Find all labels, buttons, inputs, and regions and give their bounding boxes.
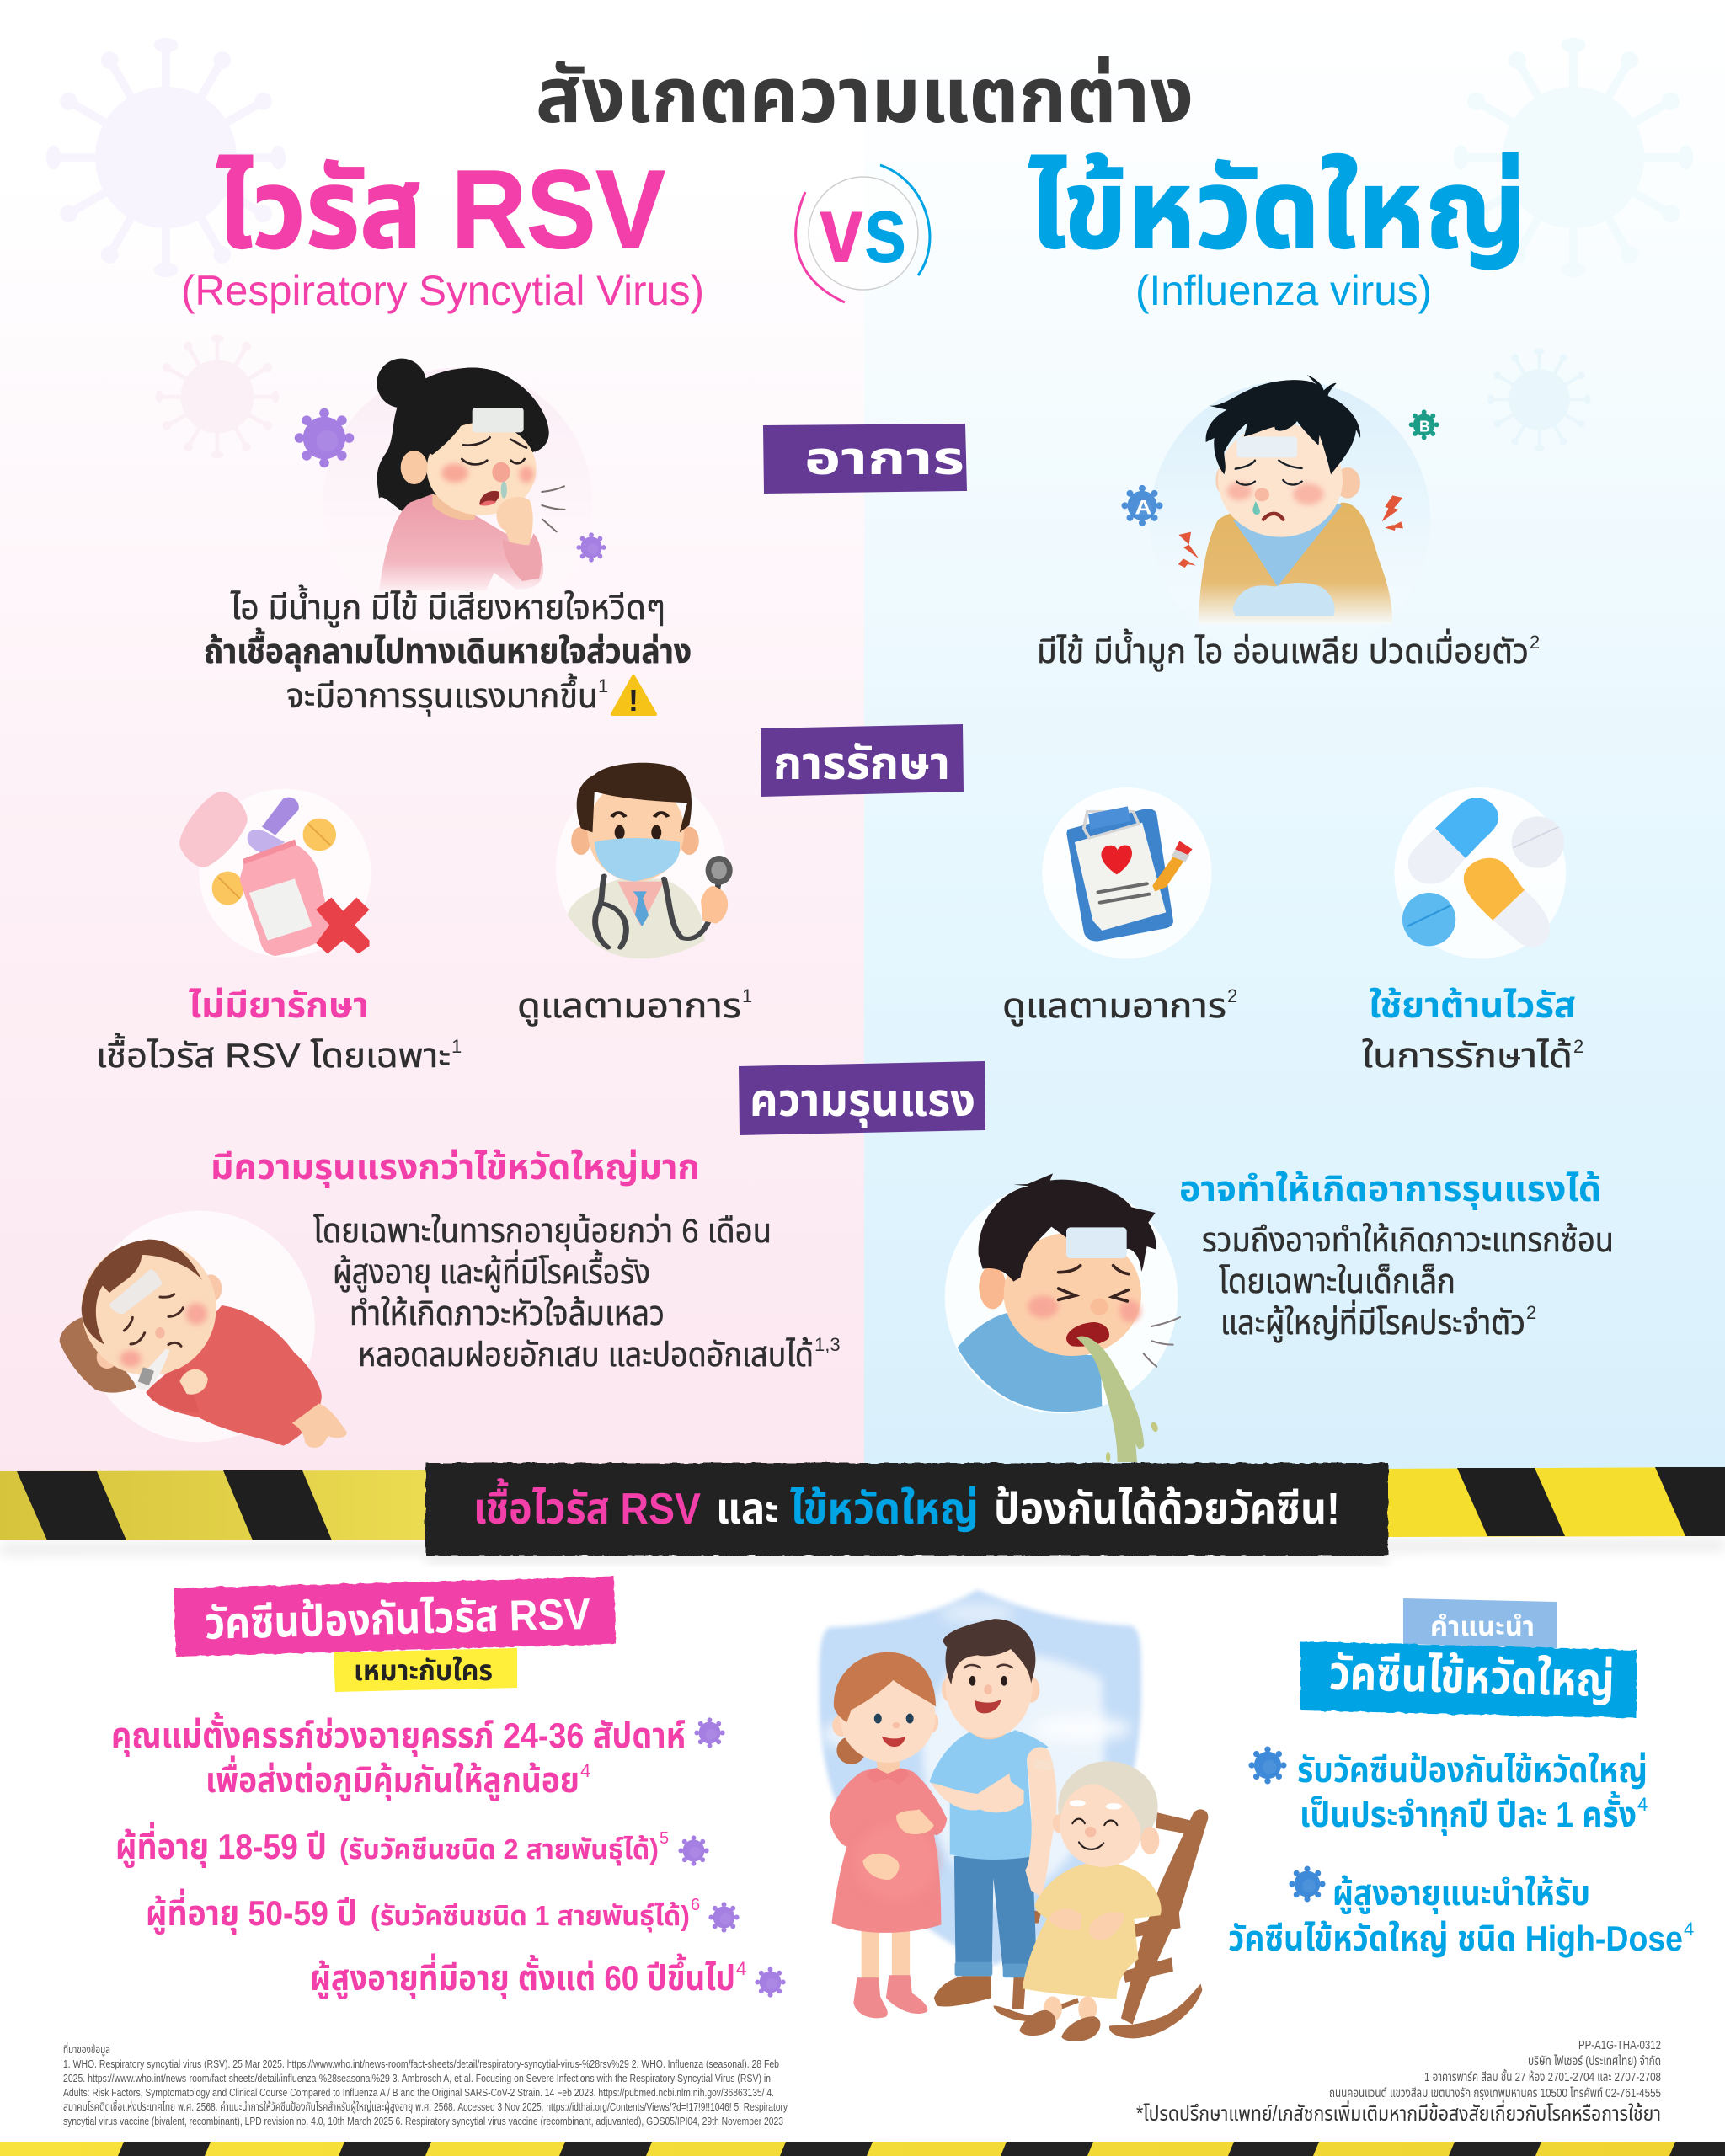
text block: RSV symptomatic care: 1 — [742, 985, 752, 1006]
text block: flu vaccine advice: 4 — [1637, 1794, 1648, 1815]
text block: influenza symptoms: มีไข้ มีน้ำมูก ไอ อ่อนเพลีย ปวดเมื่อยตัว — [1037, 628, 1529, 671]
title: สังเกตความแตกต่าง — [536, 53, 1194, 139]
text block: RSV symptoms: ถ้าเชื้อลุกลามไปทางเดินหายใจส่วนล่าง — [204, 627, 692, 672]
text block: influenza symptoms: 2 — [1530, 632, 1540, 653]
heading: RSV severity: มีความรุนแรงกว่าไข้หวัดใหญ่มาก — [211, 1147, 700, 1188]
text block: RSV vaccine eligibility: (รับวัคซีนชนิด 1 สายพันธุ์ได้) — [371, 1900, 690, 1933]
text block: flu vaccine advice: รับวัคซีนป้องกันไข้หวัดใหญ่ — [1297, 1750, 1648, 1790]
text block: flu vaccine advice: ผู้สูงอายุแนะนำให้รับ — [1332, 1873, 1590, 1914]
text block: RSV symptoms: จะมีอาการรุนแรงมากขึ้น — [286, 673, 598, 716]
label: RSV vaccine — [174, 1577, 616, 1657]
illustration: sick baby with thermometer — [60, 1211, 347, 1448]
heading: influenza — [1028, 147, 1527, 314]
section label: treatment: การรักษา — [773, 739, 950, 789]
references: syncytial virus vaccine (bivalent, recombinant), LPD revision no. 4.0, 10th March 2025 6. Respiratory syncytial virus vaccine (recombinant, adjuvanted), GDS05/IPI04, 29th November 2023 — [63, 2115, 783, 2127]
text block: RSV vaccine eligibility — [111, 1711, 746, 1999]
text block: antiviral treatment: 2 — [1573, 1036, 1583, 1057]
panel background: RSV pink side — [0, 0, 864, 1482]
icon: virus type A: A — [1135, 496, 1151, 519]
text block: RSV symptomatic care: ดูแลตามอาการ — [517, 988, 741, 1026]
shield — [820, 1590, 1141, 1965]
text block: RSV vaccine eligibility: 4 — [736, 1958, 746, 1979]
label: recommendation — [1403, 1598, 1557, 1648]
icon: purple virus large — [295, 408, 354, 467]
text block: RSV vaccine eligibility: คุณแม่ตั้งครรภ์ช่วงอายุครรภ์ 24-36 สัปดาห์ — [111, 1711, 686, 1757]
illustration: medicine bottle with cross — [179, 789, 371, 958]
illustration: family with shield — [820, 1590, 1208, 2041]
panel background: influenza blue side — [864, 0, 1725, 1482]
text block: RSV vaccine eligibility: 6 — [691, 1896, 700, 1914]
icon: virus type A — [1121, 485, 1162, 526]
icon: warning triangle — [612, 676, 655, 718]
illustration: doctor with mask — [556, 763, 733, 958]
text block: RSV severity detail: ทำให้เกิดภาวะหัวใจล้มเหลว — [350, 1295, 665, 1332]
text block: flu severity detail: โดยเฉพาะในเด็กเล็ก — [1219, 1263, 1455, 1300]
illustration: woman coughing — [323, 359, 592, 638]
banner: vaccine message: และ — [716, 1485, 779, 1534]
text block: flu severity detail: รวมถึงอาจทำให้เกิดภาวะแทรกซ้อน — [1202, 1222, 1614, 1259]
background virus: small right — [1487, 348, 1591, 451]
background virus: large left — [46, 38, 286, 277]
banner: vaccine message: ป้องกันได้ด้วยวัคซีน! — [994, 1485, 1340, 1534]
text block: RSV symptoms: 1 — [598, 675, 608, 696]
text block: RSV severity detail: โดยเฉพาะในทารกอายุน้อยกว่า 6 เดือน — [313, 1213, 772, 1251]
illustration: clipboard with heart — [1042, 787, 1212, 958]
text block: RSV symptoms: ไอ มีน้ำมูก มีไข้ มีเสียงหายใจหวีดๆ — [230, 584, 665, 627]
company details: PP-A1G-THA-0312 — [1578, 2038, 1661, 2052]
banner: vaccine message — [425, 1463, 1388, 1563]
background virus: small left — [155, 335, 280, 458]
icon: purple virus bullet 1 — [694, 1717, 725, 1748]
label: recommendation: คำแนะนำ — [1430, 1611, 1535, 1641]
hazard tape band — [0, 1467, 1725, 1556]
text block: flu vaccine advice — [1228, 1750, 1694, 1958]
icon: warning triangle: ! — [628, 683, 638, 718]
text block: RSV severity detail: 1,3 — [814, 1334, 841, 1355]
icon: blue virus bullet 1 — [1248, 1746, 1287, 1785]
icon: virus type B: B — [1419, 418, 1430, 435]
references — [63, 2041, 788, 2127]
label: suitable for whom — [334, 1648, 517, 1692]
label: suitable for whom: เหมาะกับใคร — [354, 1655, 493, 1687]
text block: flu severity detail — [1202, 1222, 1614, 1342]
heading: flu severity: อาจทำให้เกิดอาการรุนแรงได้ — [1179, 1169, 1601, 1210]
text block: RSV severity detail: หลอดลมฝอยอักเสบ และปอดอักเสบได้ — [358, 1337, 814, 1374]
banner: vaccine message: ไข้หวัดใหญ่ — [790, 1485, 979, 1534]
text block: flu vaccine advice: เป็นประจำทุกปี ปีละ 1 ครั้ง — [1300, 1790, 1637, 1836]
references: Adults: Risk Factors, Symptomatology and Clinical Course Compared to Influenza A / B and the Original SARS-CoV-2 Strain. 14 Feb 2023. https://pubmed.ncbi.nlm.nih.gov/36863135/ 4. — [63, 2086, 774, 2099]
bottom hazard tape — [0, 2142, 1725, 2156]
text block: RSV severity detail: ผู้สูงอายุ และผู้ที่มีโรคเรื้อรัง — [333, 1249, 650, 1292]
text block: antiviral treatment: ใช้ยาต้านไวรัส — [1369, 985, 1576, 1025]
illustration: boy with flu under blanket — [1121, 375, 1439, 661]
influenza subtitle: (Influenza virus) — [1135, 267, 1432, 314]
references: 1. WHO. Respiratory syncytial virus (RSV). 25 Mar 2025. https://www.who.int/news-room/fact-sheets/detail/respiratory-syncytial-virus-%28rsv%29 2. WHO. Influenza (seasonal). 28 Feb — [63, 2057, 779, 2070]
text block: flu vaccine advice: วัคซีนไข้หวัดใหญ่ ชนิด High-Dose — [1228, 1919, 1683, 1958]
illustration: boy vomiting — [945, 1173, 1180, 1462]
mother — [830, 1652, 947, 2018]
text block: RSV vaccine eligibility: ผู้ที่อายุ 50-59 ปี — [146, 1888, 357, 1935]
section label: severity — [739, 1061, 985, 1135]
company details: 1 อาคารพาร์ค สีลม ชั้น 27 ห้อง 2701-2704 และ 2707-2708 — [1424, 2068, 1661, 2084]
icon: blue virus bullet 2 — [1289, 1865, 1326, 1903]
text block: RSV vaccine eligibility: (รับวัคซีนชนิด 2 สายพันธุ์ได้) — [339, 1833, 659, 1866]
text block: flu symptomatic care: 2 — [1227, 985, 1237, 1006]
icon: purple virus bullet 4 — [755, 1967, 786, 1998]
icon: purple virus small — [576, 532, 606, 563]
banner: vaccine message: เชื้อไวรัส RSV — [473, 1478, 701, 1534]
text block: flu severity detail: 2 — [1526, 1302, 1536, 1323]
references: ที่มาของข้อมูล — [63, 2041, 110, 2056]
father — [930, 1619, 1056, 2007]
versus badge — [796, 165, 930, 302]
text block: RSV vaccine eligibility: เพื่อส่งต่อภูมิคุ้มกันให้ลูกน้อย — [206, 1755, 579, 1801]
illustration: antiviral pills — [1394, 787, 1566, 958]
text block: RSV vaccine eligibility: ผู้ที่อายุ 18-59 ปี — [115, 1822, 327, 1868]
icon: virus type B — [1409, 409, 1439, 440]
company details: บริษัท ไฟเซอร์ (ประเทศไทย) จำกัด — [1528, 2054, 1661, 2068]
text block: flu symptomatic care: ดูแลตามอาการ — [1002, 988, 1226, 1026]
RSV subtitle: (Respiratory Syncytial Virus) — [181, 267, 704, 314]
influenza main title: ไข้หวัดใหญ่ — [1028, 147, 1527, 271]
RSV main title: ไวรัส RSV — [216, 147, 665, 271]
heading: RSV — [181, 147, 704, 314]
icon: purple virus bullet 3 — [708, 1902, 740, 1933]
text block: RSV severity detail — [313, 1213, 841, 1374]
text block: no specific drug: ไม่มียารักษา — [189, 985, 369, 1025]
references: 2025. https://www.who.int/news-room/fact-sheets/detail/influenza-%28seasonal%29 3. Ambrosch A, et al. Focusing on Severe Infections with the Respiratory Syncytial Virus (RSV) in — [63, 2072, 771, 2084]
text block: no specific drug — [96, 985, 462, 1075]
vs letters: vs — [820, 177, 907, 282]
text block: flu vaccine advice: 4 — [1684, 1919, 1694, 1940]
text block: flu severity detail: และผู้ใหญ่ที่มีโรคประจำตัว — [1220, 1299, 1525, 1342]
grandmother — [1019, 1761, 1162, 2041]
label: flu vaccine: วัคซีนไข้หวัดใหญ่ — [1328, 1646, 1616, 1706]
grandmother chair — [993, 1809, 1208, 2038]
text block: RSV vaccine eligibility: 4 — [580, 1760, 590, 1781]
section label: treatment — [761, 724, 964, 797]
company details — [1136, 2038, 1661, 2126]
text block: antiviral treatment: ในการรักษาได้ — [1362, 1038, 1573, 1075]
section label: symptoms: อาการ — [804, 434, 964, 484]
text block: RSV vaccine eligibility: 5 — [660, 1829, 669, 1848]
text block: no specific drug: เชื้อไวรัส RSV โดยเฉพาะ — [96, 1033, 451, 1075]
label: flu vaccine — [1300, 1641, 1637, 1718]
label: RSV vaccine: วัคซีนป้องกันไวรัส RSV — [204, 1590, 591, 1649]
section label: symptoms — [763, 424, 967, 494]
icon: purple virus bullet 2 — [678, 1835, 709, 1866]
text block: antiviral treatment — [1362, 985, 1583, 1075]
text block: RSV vaccine eligibility: ผู้สูงอายุที่มีอายุ ตั้งแต่ 60 ปีขึ้นไป — [310, 1953, 735, 1999]
section label: severity: ความรุนแรง — [750, 1075, 975, 1128]
background virus: large right — [1454, 38, 1693, 277]
references: สมาคมโรคติดเชื้อแห่งประเทศไทย พ.ศ. 2568. คำแนะนำการให้วัคซีนป้องกันโรคสำหรับผู้ใหญ่และผู้สูงอายุ พ.ศ. 2568. Accessed 3 Nov 2025. https://idthai.org/Contents/Views/?d=!17!9!!1046! 5. Respiratory — [63, 2099, 788, 2113]
text block: no specific drug: 1 — [451, 1036, 462, 1057]
text block: RSV symptoms — [204, 584, 692, 716]
